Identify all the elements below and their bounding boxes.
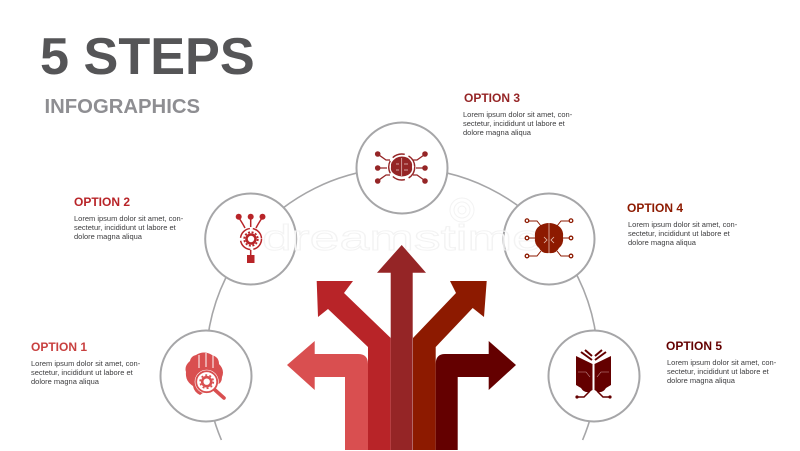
option 5 body [667, 358, 776, 385]
option 4 text [627, 201, 737, 247]
option 2 body [74, 214, 183, 241]
circle 1 [160, 330, 252, 422]
icon: brain with magnifier [186, 352, 224, 398]
option 4 body: dolore magna aliqua [628, 238, 696, 247]
subtitle: INFOGRAPHICS [44, 96, 200, 118]
connecting arc [206, 168, 598, 440]
option 5 heading: OPTION 5 [666, 339, 722, 353]
option 3 text [463, 91, 572, 137]
option 1 body [31, 358, 140, 386]
circle 2 [205, 194, 296, 284]
option 2 body: sectetur, incididunt ut labore et [74, 223, 176, 232]
option 3 body: dolore magna aliqua [463, 128, 531, 137]
option 1 heading: OPTION 1 [31, 340, 87, 354]
option 3 body: sectetur, incididunt ut labore et [463, 119, 565, 128]
option 5 body: Lorem ipsum dolor sit amet, con- [667, 358, 776, 366]
arrow 4: up-right [413, 281, 487, 450]
option 2 body: Lorem ipsum dolor sit amet, con- [74, 214, 183, 222]
option 2 heading: OPTION 2 [74, 195, 130, 209]
arrow 5: right [436, 341, 516, 450]
option 3 body [463, 110, 572, 137]
icon: book with brain [575, 350, 612, 399]
option 3 heading: OPTION 3 [464, 91, 520, 105]
watermark: dreamstime [262, 217, 542, 258]
option 1 body: dolore magna aliqua [31, 377, 99, 386]
circle 3 [356, 122, 448, 214]
option 1 text [31, 340, 140, 386]
option 5 text [666, 339, 776, 385]
option 5 body: dolore magna aliqua [667, 376, 735, 385]
option 1 body: sectetur, incididunt ut labore et [31, 368, 133, 377]
arrow 3: up [377, 245, 426, 450]
option 3 body: Lorem ipsum dolor sit amet, con- [463, 110, 572, 118]
option 2 text [74, 195, 183, 241]
option 2 body: dolore magna aliqua [74, 232, 142, 241]
arrow 1: left [287, 341, 368, 450]
title: 5 STEPS [40, 28, 255, 86]
icon: brain with circuit nodes [375, 151, 428, 184]
circle 5 [548, 330, 640, 422]
option 4 body [628, 220, 737, 247]
icon: gear with nodes [236, 214, 266, 263]
option 5 body: sectetur, incididunt ut labore et [667, 367, 769, 376]
option 4 body: sectetur, incididunt ut labore et [628, 229, 730, 238]
arrow 2: up-left [317, 281, 391, 450]
option 1 body: Lorem ipsum dolor sit amet, con- [31, 358, 140, 368]
circle 4 [504, 194, 594, 284]
option 4 body: Lorem ipsum dolor sit amet, con- [628, 220, 737, 228]
icon: brain with side connectors [525, 219, 573, 258]
watermark [262, 198, 542, 258]
option 4 heading: OPTION 4 [627, 201, 683, 215]
